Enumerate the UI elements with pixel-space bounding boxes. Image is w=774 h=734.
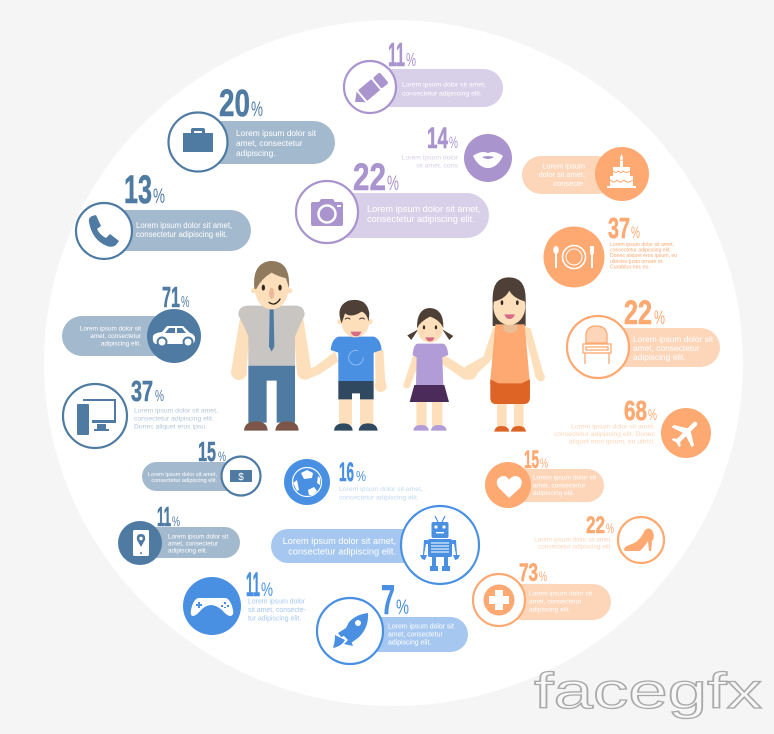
item: 20% briefcase: % bbox=[251, 98, 263, 121]
item: 37% computer: 37 bbox=[131, 376, 153, 408]
item: 68% plane: consectetur adipiscing elit. Donec bbox=[554, 431, 656, 438]
item: 13% phone: Lorem ipsum dolor sit amet, bbox=[136, 221, 232, 230]
item: 37% plate: % bbox=[631, 223, 640, 242]
item: 15% heart: % bbox=[540, 455, 548, 471]
item: 15% dollar: Lorem ipsum dolor sit amet, bbox=[148, 472, 217, 478]
mother bbox=[463, 277, 545, 432]
item: 14% lips: 14 bbox=[427, 122, 448, 155]
item: 11% pencil: % bbox=[406, 50, 416, 70]
item: 15% heart: 15 bbox=[524, 446, 539, 474]
item: 22% vanity: amet, consectetur bbox=[633, 343, 700, 353]
icon: pencil bbox=[351, 72, 389, 107]
icon: lips bbox=[473, 152, 503, 168]
item: 22% vanity: Lorem ipsum dolor sit bbox=[633, 334, 714, 344]
item: 73% medical: adipiscing elit. bbox=[529, 606, 571, 614]
item: 37% plate: Lorem ipsum dolor sit amet, bbox=[610, 242, 674, 248]
item: 22% camera: 22 bbox=[353, 157, 386, 199]
item: 22% camera bbox=[296, 157, 489, 243]
item: 20% briefcase: 20 bbox=[219, 83, 250, 125]
icon: airplane bbox=[665, 412, 707, 454]
item: robot: Lorem ipsum dolor sit amet, bbox=[283, 536, 396, 546]
item: 68% plane: % bbox=[648, 407, 657, 424]
item: 37% plate: consectetur adipiscing elit. bbox=[610, 248, 671, 254]
item: 7% rocket: % bbox=[396, 596, 409, 619]
item: 68% plane: Lorem ipsum dolor sit amet, bbox=[571, 424, 655, 430]
icon: cake bbox=[607, 154, 636, 188]
item: 11% gamepad bbox=[183, 566, 306, 635]
icon: high heel bbox=[624, 528, 654, 551]
item: 11% pencil: consectetur adipiscing elit. bbox=[402, 90, 482, 98]
watermark: facegfx bbox=[534, 663, 762, 719]
item: 20% briefcase: Lorem ipsum dolor sit bbox=[236, 128, 317, 138]
item: 11% gamepad: % bbox=[261, 580, 273, 601]
item: 73% medical: Lorem ipsum dolor sit bbox=[529, 590, 592, 598]
item: 7% rocket: 7 bbox=[381, 576, 395, 623]
item: 15% dollar bbox=[142, 436, 260, 496]
item: 11% map phone: Lorem ipsum dolor sit bbox=[168, 534, 228, 540]
item: 20% briefcase: adipiscing. bbox=[236, 148, 276, 158]
item: 7% rocket bbox=[317, 576, 468, 664]
item: 73% medical bbox=[473, 559, 611, 626]
item: 13% phone: consectetur adipiscing elit. bbox=[136, 230, 227, 239]
item: 15% heart bbox=[485, 446, 604, 508]
item: 68% plane: 68 bbox=[624, 395, 647, 426]
item: 37% plate: ultricies justo ornare et. bbox=[610, 259, 664, 265]
item: 22% shoe: consectetur adipiscing elit. bbox=[538, 544, 612, 550]
icon: phone bbox=[89, 215, 119, 247]
item: 37% plate bbox=[544, 213, 677, 288]
item: 7% rocket: adipiscing elit. bbox=[388, 640, 431, 646]
item: 37% computer: Donec aliquet eros ipsu. bbox=[134, 424, 207, 430]
item: 14% lips: Lorem ipsum dolor bbox=[402, 154, 459, 162]
item: 22% vanity: % bbox=[654, 308, 665, 329]
item: 22% vanity: 22 bbox=[624, 294, 652, 332]
item: 13% phone: 13 bbox=[124, 168, 152, 212]
icon: vanity table bbox=[583, 326, 611, 364]
item: 11% map phone: adipiscing elit. bbox=[168, 548, 208, 554]
icon: briefcase bbox=[183, 128, 213, 152]
item: 22% shoe: % bbox=[606, 520, 614, 536]
item: 15% dollar: consectetur adipiscing elit. bbox=[151, 478, 217, 484]
item: 22% shoe bbox=[534, 512, 664, 563]
item: 11% gamepad: Lorem ipsum dolor bbox=[248, 598, 306, 606]
item: 22% shoe: Lorem ipsum dolor sit amet, bbox=[534, 536, 612, 544]
item: 22% camera: consectetur adipiscing elit. bbox=[367, 214, 475, 224]
icon: banknote: $ bbox=[238, 472, 244, 483]
item: robot bbox=[271, 506, 479, 584]
item: 73% medical: % bbox=[539, 568, 547, 584]
item: robot: consectetur adipiscing elit. bbox=[288, 546, 396, 556]
family illustration bbox=[231, 261, 545, 432]
item: 13% phone: % bbox=[153, 185, 165, 208]
icon: plate and cutlery bbox=[553, 246, 594, 268]
item: 37% computer: consectetur adipiscing elit. bbox=[134, 416, 214, 422]
item: 22% camera: Lorem ipsum dolor sit amet, bbox=[367, 204, 480, 214]
item: 16% soccer: 16 bbox=[339, 457, 354, 487]
item: 73% medical: 73 bbox=[519, 559, 538, 587]
item: 71% car bbox=[62, 282, 201, 363]
item: 37% plate: Donec aliquet eros ipsum, eu bbox=[610, 253, 677, 259]
item: cake bbox=[522, 147, 649, 201]
item: 22% camera: % bbox=[387, 172, 399, 195]
item: 22% vanity bbox=[567, 294, 720, 378]
item: 11% pencil bbox=[344, 36, 503, 113]
item: 16% soccer: Lorem ipsum dolor sit amet, bbox=[339, 486, 423, 493]
item: 68% plane bbox=[554, 395, 711, 458]
item: cake: dolor sit amet, bbox=[539, 170, 585, 179]
boy bbox=[303, 300, 387, 431]
item: 15% dollar: % bbox=[218, 448, 226, 464]
icon: camera bbox=[311, 199, 343, 226]
item: 11% pencil: Lorem ipsum dolor sit amet, bbox=[402, 82, 486, 88]
item: 14% lips: sit amet, cons bbox=[416, 162, 459, 170]
item: 37% computer: Lorem ipsum dolor sit amet, bbox=[134, 408, 218, 414]
father bbox=[231, 261, 312, 431]
icon: rocket bbox=[333, 613, 368, 648]
item: 68% plane: aliquet eros ipsum, eu ultrici. bbox=[569, 438, 655, 446]
item: 11% gamepad: sit amet, consecte- bbox=[248, 607, 306, 614]
item: 37% plate: 37 bbox=[608, 213, 630, 245]
item: 16% soccer bbox=[284, 457, 423, 505]
item: 11% gamepad: 11 bbox=[246, 566, 260, 604]
item: 37% computer: % bbox=[155, 388, 164, 405]
item: 7% rocket: Lorem ipsum dolor sit bbox=[388, 624, 454, 630]
item: 37% computer bbox=[63, 376, 218, 448]
item: 16% soccer: % bbox=[356, 468, 366, 485]
item: cake: Lorem ipsum bbox=[542, 162, 585, 170]
icon: soccer ball bbox=[292, 468, 322, 496]
item: 20% briefcase bbox=[168, 83, 335, 172]
item: 14% lips bbox=[402, 122, 512, 182]
item: 11% map phone: % bbox=[172, 513, 180, 529]
item: 71% car: 71 bbox=[162, 282, 180, 314]
item: 15% heart: adipiscing elit. bbox=[533, 490, 575, 497]
girl bbox=[403, 308, 469, 431]
item: 11% map phone bbox=[118, 501, 240, 565]
icon: car bbox=[153, 326, 195, 346]
item: 11% map phone: amet, consectetur bbox=[168, 540, 218, 548]
item: 15% dollar: 15 bbox=[198, 436, 216, 467]
item: 22% shoe: 22 bbox=[586, 512, 605, 539]
item: 71% car: adipiscing elit. bbox=[101, 340, 141, 348]
icon: phone with pin bbox=[133, 530, 149, 556]
item: 11% map phone: 11 bbox=[157, 501, 171, 532]
item: 73% medical: amet, consectetur bbox=[529, 598, 582, 606]
item: 15% heart: amet, consectetur bbox=[533, 482, 586, 490]
item: 71% car: amet, consectetur bbox=[90, 333, 142, 340]
item: 71% car: % bbox=[181, 294, 190, 311]
icon: heart bbox=[497, 476, 522, 498]
item: 20% briefcase: amet, consectetur bbox=[236, 138, 303, 148]
item: 11% gamepad: tur adipiscing elit. bbox=[248, 616, 301, 622]
item: 13% phone bbox=[76, 168, 251, 259]
icon: computer bbox=[77, 399, 116, 435]
item: 22% vanity: adipiscing elit. bbox=[633, 352, 686, 362]
item: 37% plate: Curabitur nec ex. bbox=[610, 264, 650, 270]
item: 71% car: Lorem ipsum dolor sit bbox=[80, 326, 141, 332]
item: cake: consecte. bbox=[553, 179, 585, 188]
icon: gamepad bbox=[191, 598, 233, 616]
item: 11% pencil: 11 bbox=[388, 36, 405, 73]
icon: medical cross bbox=[484, 584, 514, 616]
item: 7% rocket: amet, consectetur bbox=[388, 632, 443, 638]
item: 14% lips: % bbox=[449, 133, 458, 152]
icon: robot bbox=[420, 516, 460, 571]
item: 15% heart: Lorem ipsum dolor sit bbox=[533, 474, 596, 482]
item: 16% soccer: consectetur adipiscing elit. bbox=[339, 494, 419, 502]
